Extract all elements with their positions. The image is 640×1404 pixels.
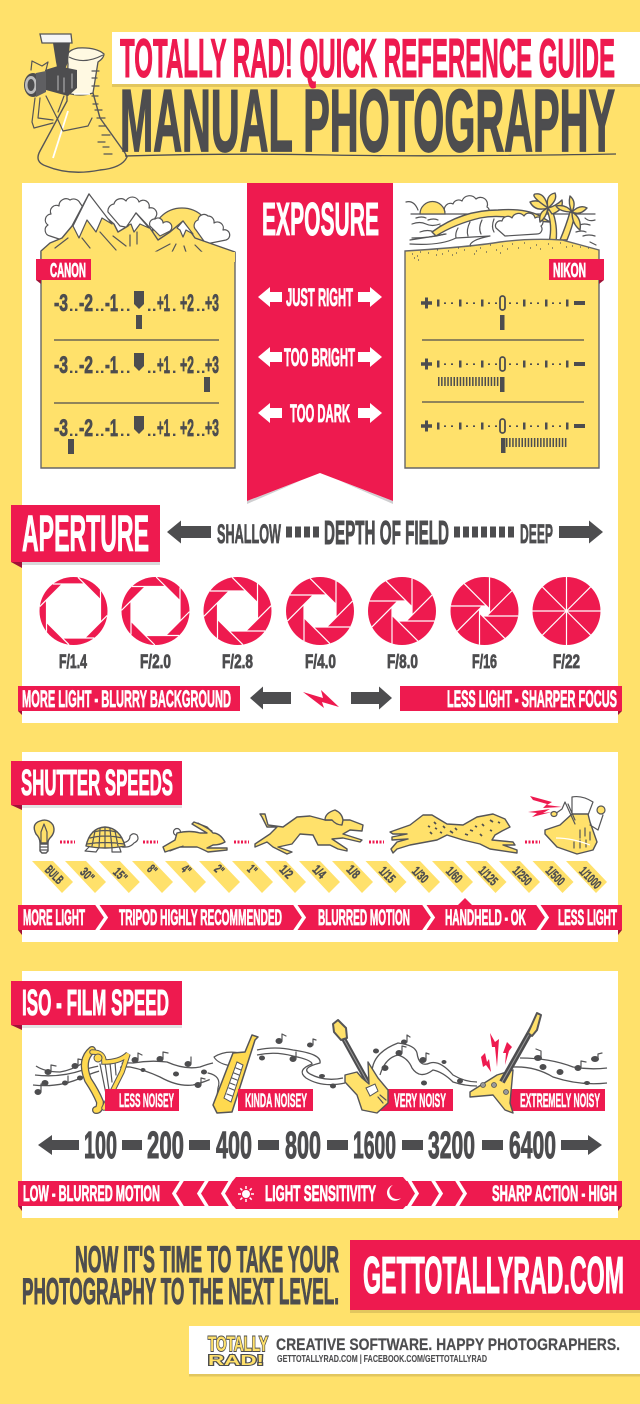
icon: beach scene xyxy=(406,193,596,246)
iso scale: 1600 xyxy=(353,1125,396,1167)
depth of field scale xyxy=(167,514,603,551)
canon meter: too dark: -3 xyxy=(54,415,68,442)
f-stop labels: F/4.0 xyxy=(305,652,336,673)
shutter speed tags: 2" xyxy=(211,862,227,878)
shutter speed tags: 30" xyxy=(77,864,98,885)
light sensitivity bar: LOW - BLURRED MOTION xyxy=(23,1181,160,1206)
aperture iris: f/22 xyxy=(532,577,600,645)
panel: canon meter xyxy=(36,194,235,468)
sand specks xyxy=(412,243,589,260)
depth of field scale: SHALLOW xyxy=(217,519,281,549)
canon meter: too bright: +2 xyxy=(180,352,194,379)
shutter speed tags: 1/8 xyxy=(343,862,363,882)
aperture iris: f/8.0 xyxy=(368,577,436,645)
shutter speed range bar: BLURRED MOTION xyxy=(318,905,410,930)
logo: totally rad: TOTALLY xyxy=(208,1333,268,1356)
panel: iso film speed xyxy=(11,971,622,1218)
shutter speed tags: 4" xyxy=(178,862,194,878)
aperture iris: f/16 xyxy=(450,577,518,645)
icon: flask with lightning xyxy=(528,796,605,854)
shutter speed tags: 1/4 xyxy=(309,862,330,882)
iso scale: 200 xyxy=(147,1125,184,1167)
row: too dark xyxy=(258,400,382,428)
canon meter: too dark: -1 xyxy=(105,415,118,442)
nikon meter: too dark xyxy=(421,419,585,453)
shutter speed tags xyxy=(32,861,607,893)
canon meter: too bright: -3 xyxy=(54,352,68,379)
tag: iso heading: ISO - FILM SPEED xyxy=(22,982,169,1023)
f-stop labels: F/2.0 xyxy=(140,652,171,673)
nikon meter: too bright xyxy=(421,357,585,392)
f-stop labels xyxy=(59,652,580,673)
header illustration: flask and camera xyxy=(24,34,127,172)
tag: shutter speeds heading xyxy=(11,761,182,810)
shutter speed tags: 1/125 xyxy=(476,863,501,888)
depth of field scale: DEEP xyxy=(520,519,553,549)
row: just right: JUST RIGHT xyxy=(286,284,353,312)
icon: sun xyxy=(238,1186,254,1202)
aperture iris: f/2.0 xyxy=(121,577,190,645)
panel: nikon meter xyxy=(405,193,604,468)
arrows and lightning xyxy=(250,686,392,710)
icon: mountains xyxy=(41,194,235,268)
icon: flying v guitar xyxy=(470,1013,541,1113)
icon: cheetah xyxy=(390,814,517,853)
depth of field scale: DEPTH OF FIELD xyxy=(324,514,449,551)
shutter speed range bar xyxy=(18,898,622,935)
canon meter: too bright: -1 xyxy=(105,352,118,379)
call to action text xyxy=(22,1239,339,1312)
panel: exposure ribbon: EXPOSURE xyxy=(262,193,379,245)
shutter speed tags: 1/500 xyxy=(543,863,568,888)
icon: moon xyxy=(387,1185,401,1201)
canon panel body xyxy=(41,251,235,468)
icon: rabbit xyxy=(163,822,227,852)
text: APERTURE xyxy=(22,505,149,562)
iso scale: 100 xyxy=(84,1125,117,1167)
canon meter: too bright: +3 xyxy=(205,352,219,379)
iso scale: 6400 xyxy=(509,1125,556,1167)
nikon panel body xyxy=(405,239,599,468)
tag: nikon: NIKON xyxy=(553,260,586,282)
label: extremely noisy xyxy=(508,1089,605,1112)
f-stop labels: F/2.8 xyxy=(222,652,253,673)
panel: shutter speeds: SHUTTER SPEEDS xyxy=(21,762,173,803)
canon meter: too bright xyxy=(54,352,219,392)
row: just right xyxy=(258,284,382,312)
shutter speed tags: 8" xyxy=(144,862,160,878)
canon meter: too dark: +3 xyxy=(205,415,219,442)
f-stop labels: F/1.4 xyxy=(59,652,87,673)
iso scale: 400 xyxy=(216,1125,252,1167)
icon: dog xyxy=(255,810,363,854)
row: too bright: TOO BRIGHT xyxy=(284,344,355,372)
aperture iris: f/4.0 xyxy=(286,577,354,645)
text: NOW IT'S TIME TO TAKE YOUR xyxy=(75,1239,339,1280)
panel: iso film speed: LESS NOISEY xyxy=(119,1091,174,1112)
light sensitivity bar: LIGHT SENSITIVITY xyxy=(265,1181,376,1206)
label: very noisy: VERY NOISY xyxy=(394,1091,446,1112)
canon meter: just right: +3 xyxy=(205,290,219,317)
canon meter: too dark: +1 xyxy=(157,415,170,442)
canon meter: just right: +1 xyxy=(157,290,170,317)
shutter speed tags: 1/30 xyxy=(409,863,432,886)
canon meter: just right: -3 xyxy=(54,290,68,317)
iso scale: 3200 xyxy=(428,1125,475,1167)
tag: nikon xyxy=(549,259,604,284)
iso scale xyxy=(38,1125,602,1167)
shutter speed range bar: TRIPOD HIGHLY RECOMMENDED xyxy=(119,905,282,930)
canon meter: just right: -2 xyxy=(79,290,93,317)
shutter speed tags: 1/2 xyxy=(276,862,296,882)
tag: aperture heading xyxy=(11,505,160,568)
icon: keytar xyxy=(208,1035,258,1113)
footer brand strip: GETTOTALLYRAD.COM | FACEBOOK.COM/GETTOTALLYRAD xyxy=(277,1354,487,1365)
icon: tortoise xyxy=(85,827,138,852)
label: kinda noisey xyxy=(238,1089,313,1112)
panel: shutter speeds xyxy=(11,752,622,942)
logo: totally rad: RAD! xyxy=(208,1352,264,1369)
icon: light bulb xyxy=(34,820,54,853)
aperture iris: f/1.4 xyxy=(40,577,108,645)
iso scale: 800 xyxy=(285,1125,321,1167)
footer brand strip xyxy=(189,1326,640,1376)
shutter speed tags: 1/60 xyxy=(443,863,466,886)
canon meter: just right: -1 xyxy=(105,290,118,317)
label: less noisey xyxy=(105,1089,179,1112)
bar: more light, blurry background xyxy=(18,686,240,715)
aperture iris: f/2.8 xyxy=(204,577,272,645)
canon meter: just right: +2 xyxy=(180,290,194,317)
icon: harp xyxy=(85,1050,128,1110)
tag: canon: CANON xyxy=(50,260,86,282)
canon meter: too bright: +1 xyxy=(157,352,170,379)
panel: exposure ribbon xyxy=(247,183,393,504)
title banner xyxy=(112,27,640,89)
nikon meter: just right xyxy=(421,296,585,330)
shutter speed tags: 1" xyxy=(244,862,260,878)
light sensitivity bar xyxy=(18,1175,622,1211)
shutter speed tags: BULB xyxy=(42,862,67,887)
canon meter: too dark xyxy=(54,415,219,454)
f-stop labels: F/16 xyxy=(472,652,497,673)
canon meter: too dark: -2 xyxy=(79,415,93,442)
f-stop labels: F/8.0 xyxy=(387,652,418,673)
text: MORE LIGHT - BLURRY BACKGROUND xyxy=(22,686,231,713)
shutter speed range bar: HANDHELD - OK xyxy=(445,905,526,930)
music staff xyxy=(33,1034,607,1095)
bar: less light, sharper focus xyxy=(400,686,622,715)
logo: totally rad xyxy=(208,1333,268,1369)
shutter speed tags: 1/15 xyxy=(376,863,399,886)
shutter speed tags: 15" xyxy=(110,864,131,885)
shutter speed tags: 1/250 xyxy=(510,863,535,888)
row: too bright xyxy=(258,344,382,372)
canon meter: too bright: -2 xyxy=(79,352,93,379)
canon meter: too dark: +2 xyxy=(180,415,194,442)
f-stop labels: F/22 xyxy=(553,652,580,673)
canon meter: just right xyxy=(54,290,219,329)
tag: canon xyxy=(36,259,91,284)
tag: iso heading xyxy=(11,981,182,1030)
panel: iso film speed: KINDA NOISEY xyxy=(245,1091,307,1112)
label: very noisy xyxy=(378,1089,453,1112)
shutter speed tags: 1/1000 xyxy=(576,864,604,892)
icon: bass guitar xyxy=(333,1020,388,1113)
shutter speed range bar: MORE LIGHT xyxy=(23,905,85,930)
row: too dark: TOO DARK xyxy=(290,400,350,428)
panel: exposure and aperture background xyxy=(22,183,618,723)
